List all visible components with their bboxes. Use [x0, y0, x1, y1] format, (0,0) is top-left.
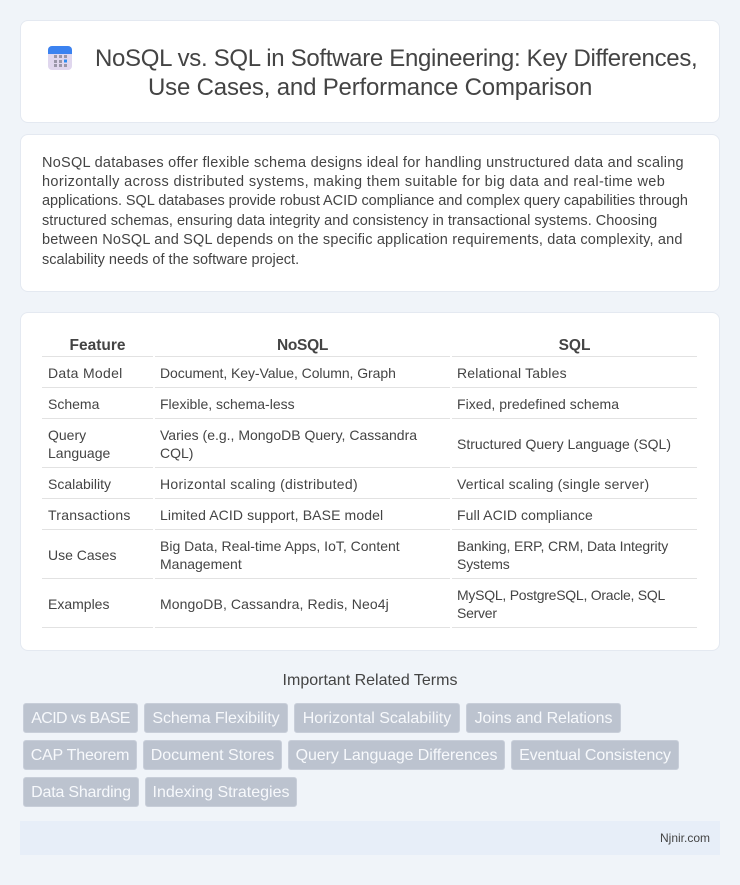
row: Examples: Examples — [48, 596, 109, 612]
tag — [23, 777, 139, 807]
row: Examples — [48, 587, 665, 621]
row: Transactions: Limited ACID support, BASE model — [160, 507, 383, 523]
tag — [294, 703, 460, 733]
row: Schema: Fixed, predefined schema — [457, 396, 619, 412]
row: Examples: MySQL, PostgreSQL, Oracle, SQL — [457, 587, 665, 603]
title: NoSQL vs. SQL in Software Engineering: Key Differences, — [95, 45, 697, 72]
row: Transactions: Full ACID compliance — [457, 507, 593, 523]
row: Query Language: Query — [48, 427, 86, 443]
text: introduction paragraph: scalability needs of the software project. — [42, 252, 299, 268]
table header: NoSQL: NoSQL — [277, 337, 328, 354]
tag: Query Language Differences — [296, 747, 497, 764]
row: Examples: Server — [457, 605, 497, 621]
row: Use Cases: Systems — [457, 556, 510, 572]
row: Scalability: Horizontal scaling (distributed) — [160, 476, 358, 492]
tags: related terms — [23, 703, 679, 807]
text: introduction paragraph: applications. SQL databases provide robust ACID compliance and complex query capabilities through — [42, 193, 688, 209]
row: Data Model: Data Model — [48, 365, 123, 381]
tag: Indexing Strategies — [152, 784, 289, 801]
row: Data Model — [48, 365, 567, 381]
tag: Document Stores — [151, 747, 274, 764]
title: Use Cases, and Performance Comparison — [148, 74, 592, 101]
panel: header — [20, 20, 720, 123]
row: Use Cases: Big Data, Real-time Apps, IoT, Content — [160, 538, 400, 554]
row: Transactions: Transactions — [48, 507, 131, 523]
row: Schema: Flexible, schema-less — [160, 396, 295, 412]
row: Query Language: CQL) — [160, 445, 193, 461]
table header: Feature: Feature — [70, 337, 126, 354]
row: Query Language: Language — [48, 445, 110, 461]
tag: Data Sharding — [31, 784, 131, 801]
tag — [23, 703, 138, 733]
tag — [511, 740, 679, 770]
footer bar — [20, 821, 720, 855]
tag — [23, 740, 137, 770]
row: Query Language: Structured Query Language (SQL) — [457, 436, 671, 452]
tag — [145, 777, 297, 807]
row: Use Cases: Use Cases — [48, 547, 116, 563]
icon: calendar grid — [48, 46, 72, 70]
row: Data Model: Relational Tables — [457, 365, 567, 381]
text: introduction paragraph: structured schemas, ensuring data integrity and consistency in transactional systems. Choosing — [42, 213, 657, 229]
text: introduction paragraph: NoSQL databases offer flexible schema designs ideal for handling unstructured data and scaling — [42, 154, 684, 170]
row: Query Language — [48, 427, 671, 461]
row: Scalability: Scalability — [48, 476, 111, 492]
tag — [143, 740, 282, 770]
row: Transactions — [48, 507, 593, 523]
row: Schema — [48, 396, 620, 412]
row: Schema: Schema — [48, 396, 99, 412]
row: Use Cases: Banking, ERP, CRM, Data Integrity — [457, 538, 668, 554]
tag: Joins and Relations — [475, 710, 612, 727]
row: Examples: MongoDB, Cassandra, Redis, Neo4j — [160, 596, 389, 612]
tag: Eventual Consistency — [519, 747, 671, 764]
footer: source: Njnir.com — [660, 831, 710, 845]
tag: ACID vs BASE — [31, 710, 130, 727]
table header: SQL: SQL — [559, 337, 590, 354]
tag: Schema Flexibility — [152, 710, 280, 727]
row: Use Cases: Management — [160, 556, 242, 572]
panel: comparison table — [20, 312, 720, 651]
tag: Horizontal Scalability — [303, 710, 451, 727]
row: Query Language: Varies (e.g., MongoDB Query, Cassandra — [160, 427, 417, 443]
tag: CAP Theorem — [31, 747, 129, 764]
text: introduction paragraph: between NoSQL and SQL depends on the specific application requirements, data complexity, and — [42, 232, 683, 248]
panel: introduction — [20, 134, 720, 292]
row: Scalability — [48, 476, 649, 492]
row: Scalability: Vertical scaling (single server) — [457, 476, 649, 492]
row: Data Model: Document, Key-Value, Column, Graph — [160, 365, 396, 381]
tag — [144, 703, 288, 733]
tag — [466, 703, 621, 733]
row: Use Cases — [48, 538, 668, 572]
text: introduction paragraph: horizontally across distributed systems, making them suitable for big data and real-time web — [42, 174, 665, 190]
heading: Important Related Terms: Important Related Terms — [283, 672, 457, 689]
text: introduction paragraph — [42, 154, 688, 268]
title — [95, 45, 697, 101]
tag — [288, 740, 505, 770]
